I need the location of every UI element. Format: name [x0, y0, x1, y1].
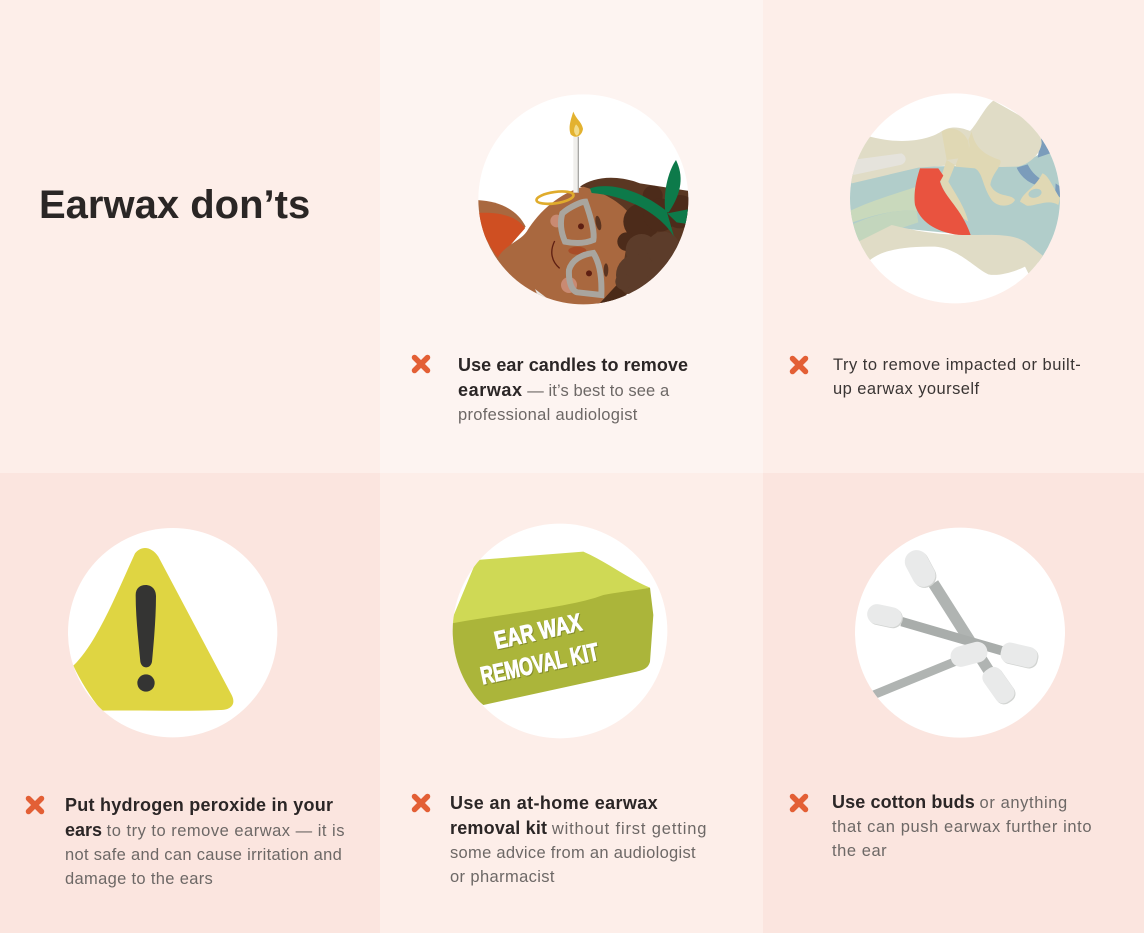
text: impacted earwax: up earwax yourself [833, 380, 980, 398]
text: hydrogen peroxide: ears to try to remove earwax — it is [65, 820, 345, 840]
text: removal kit: some advice from an audiologist [450, 844, 696, 862]
text: impacted earwax: Try to remove impacted or built- [833, 356, 1081, 374]
text: hydrogen peroxide: Put hydrogen peroxide in your [65, 795, 333, 815]
panel: ear candles [412, 94, 688, 424]
icon: cross [412, 794, 430, 812]
text: removal kit: or pharmacist [450, 868, 555, 886]
icon: cross [790, 794, 808, 812]
icon: ear canal cross-section [850, 94, 1060, 304]
icon: ear wax removal kit box [452, 524, 668, 738]
text: removal kit: Use an at-home earwax [450, 793, 658, 813]
icon: ear wax removal kit box: REMOVAL KIT [478, 639, 601, 690]
text: hydrogen peroxide: damage to the ears [65, 870, 213, 888]
text: removal kit: removal kit without first getting [450, 818, 707, 838]
icon: ear wax removal kit box: EAR WAX [492, 609, 585, 655]
icon: ear candle on head [478, 94, 688, 304]
text: cotton buds: Use cotton buds or anything [832, 792, 1068, 812]
text: cotton buds: the ear [832, 842, 887, 860]
text: ear candles: professional audiologist [458, 406, 638, 424]
text: cotton buds: that can push earwax further into [832, 818, 1092, 836]
title: Earwax don’ts [39, 183, 310, 227]
icon: warning triangle [68, 528, 278, 738]
icon: cross [26, 796, 44, 814]
text: hydrogen peroxide: not safe and can cause irritation and [65, 846, 342, 864]
icon: cross [790, 356, 808, 374]
text: ear candles: earwax — it’s best to see a [458, 380, 669, 400]
panel: removal kit [412, 524, 706, 886]
icon: ear wax removal kit box: EAR WAX [493, 610, 586, 656]
text: ear candles [458, 355, 688, 424]
icon: cross [412, 354, 430, 374]
icon: cotton buds [855, 528, 1065, 738]
panel: cotton buds [763, 473, 1144, 933]
text: removal kit [450, 793, 707, 886]
panel: hydrogen peroxide [0, 473, 380, 933]
text: impacted earwax [833, 356, 1081, 398]
panel: impacted earwax [790, 94, 1080, 398]
text: hydrogen peroxide [65, 795, 345, 888]
panel: title [0, 0, 380, 473]
icon: ear wax removal kit box: REMOVAL KIT [479, 640, 602, 691]
text: cotton buds [832, 792, 1092, 860]
text: ear candles: Use ear candles to remove [458, 355, 688, 375]
